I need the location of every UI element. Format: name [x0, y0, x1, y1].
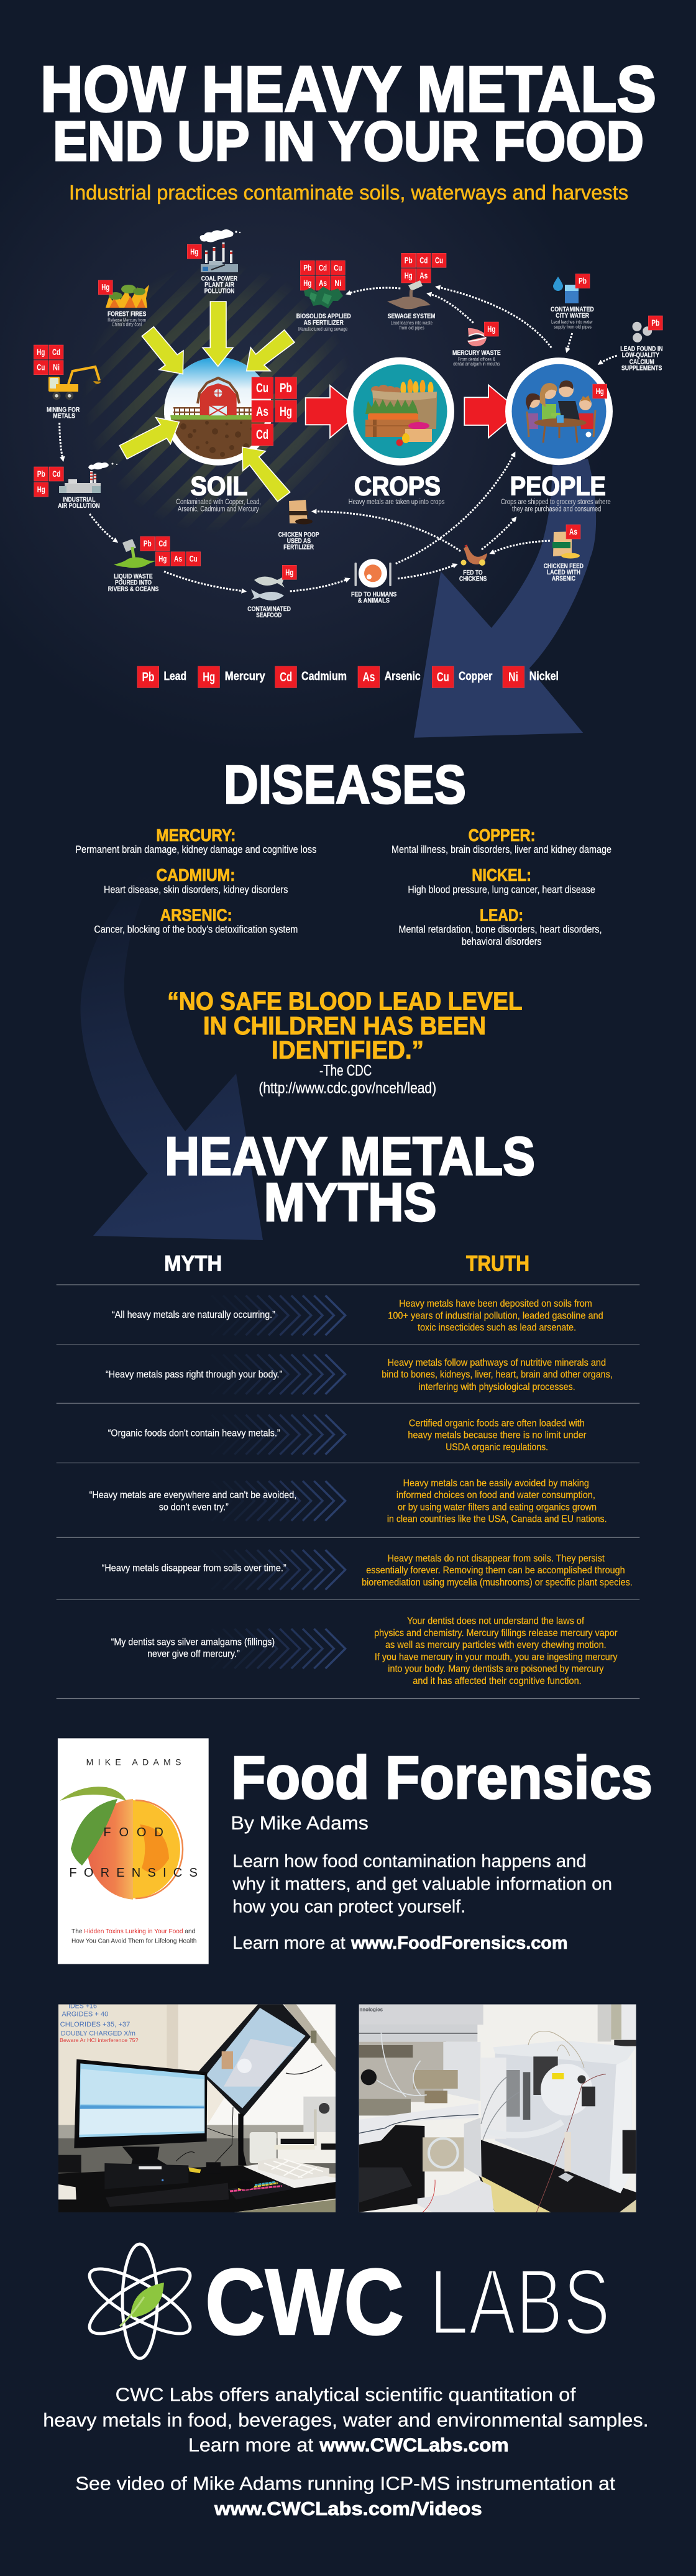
label: INDUSTRIAL [63, 496, 96, 504]
disease: cadmium [104, 865, 288, 895]
dotted flow arrows [60, 287, 617, 591]
label: CHICKENS [459, 576, 487, 583]
row 6: Your dentist does not understand the laws of [407, 1616, 584, 1626]
row 6: as well as mercury particles with every chewing motion. [385, 1640, 607, 1650]
row 6: into your body. Many dentists are poisoned by mercury [388, 1664, 603, 1675]
label [47, 407, 80, 420]
book text: How You Can Avoid Them for Lifelong Health [71, 1937, 197, 1944]
whiteboard notes: CHLORIDES +35, +37 [60, 2021, 130, 2028]
row 6: “My dentist says silver amalgams (fillings) [111, 1637, 275, 1647]
cwc labs logo [81, 2244, 610, 2358]
label: SEWAGE SYSTEM [388, 313, 435, 320]
label: FERTILIZER [283, 543, 314, 551]
label: LACED WITH [547, 569, 580, 576]
quote [167, 987, 523, 1097]
label [459, 569, 487, 583]
crops illustration [365, 379, 437, 446]
legend: Cadmium [301, 670, 347, 683]
row 4: or by using water filters and eating organics grown [398, 1502, 597, 1512]
crops circle [346, 357, 454, 466]
row 6: never give off mercury.” [147, 1649, 240, 1660]
logotype: CWC [205, 2249, 404, 2354]
row 3 [108, 1418, 587, 1453]
legend: Hg [203, 670, 215, 684]
row 5 [102, 1553, 633, 1588]
row 6: If you have mercury in your mouth, you are ingesting mercury [375, 1652, 618, 1662]
disease: arsenic: ARSENIC: [160, 905, 232, 924]
icon: coal plant [200, 229, 240, 272]
family at table illustration [526, 380, 595, 443]
label [544, 563, 584, 582]
badges: Pb [303, 262, 311, 272]
icon: plate with salmon, fork and knife [354, 559, 392, 587]
book text: FOOD [103, 1826, 163, 1839]
fence [173, 407, 252, 415]
promo link: www.FoodForensics.com [350, 1933, 568, 1953]
badges [34, 345, 63, 375]
cwc labs description: www.CWCLabs.com [319, 2434, 509, 2455]
panel: crops [346, 357, 454, 506]
label: METALS [53, 413, 75, 420]
label: MERCURY WASTE [452, 349, 501, 357]
badges [300, 260, 345, 290]
label: RIVERS & OCEANS [108, 586, 158, 593]
label: POURED INTO [115, 579, 152, 587]
legend: Lead [164, 670, 186, 683]
label [278, 531, 319, 551]
badge: Pb [579, 276, 587, 286]
row 1: toxic insecticides such as lead arsenate. [418, 1323, 576, 1333]
promo description: why it matters, and get valuable information on [232, 1874, 612, 1894]
disease: cadmium: CADMIUM: [156, 865, 235, 885]
book text: MIKE ADAMS [86, 1757, 181, 1767]
label [108, 573, 158, 593]
description: Manufactured using sewage [298, 326, 347, 332]
badges: Ni [53, 362, 60, 372]
red arrow: soil to crops [306, 385, 362, 438]
legend: Pb [142, 670, 154, 684]
icon: forest fire [106, 285, 149, 308]
legend: Copper [459, 670, 493, 683]
icon: fertilizer bag [289, 500, 313, 525]
soil arrows [119, 301, 295, 502]
icon: pouring sewage [387, 280, 431, 309]
icon: excavator [48, 367, 101, 400]
row 2: interfering with physiological processes. [419, 1382, 575, 1392]
quote: IN CHILDREN HAS BEEN [203, 1011, 486, 1040]
description: From dental offices & [458, 356, 495, 362]
label: SEAFOOD [256, 612, 282, 619]
promo link [232, 1933, 568, 1953]
promo description: Learn how food contamination happens and [232, 1852, 587, 1872]
badges: Cd [52, 469, 60, 479]
icon: green biosolid pile [304, 287, 343, 308]
row 5: essentially forever. Removing them can be accomplished through [366, 1565, 625, 1576]
badge: Hg [101, 282, 109, 292]
people badge [593, 384, 607, 398]
source: forest fires [98, 280, 149, 328]
description: from old pipes [400, 324, 424, 331]
icon: atom with leaf [81, 2244, 198, 2358]
disease: mercury: Permanent brain damage, kidney damage and cognitive loss [75, 844, 316, 855]
label: AS FERTILIZER [304, 319, 344, 326]
people badge: Hg [596, 386, 604, 396]
legend: Cu [437, 670, 449, 684]
label: AIR POLLUTION [58, 502, 100, 510]
panel: food forensics promo [231, 1744, 652, 1953]
row 6: physics and chemistry. Mercury fillings release mercury vapor [374, 1628, 618, 1639]
label: CITY WATER [556, 312, 589, 320]
source: biosolids [296, 260, 351, 332]
badge: Pb [651, 318, 659, 328]
row 1: 100+ years of industrial pollution, leaded gasoline and [388, 1310, 603, 1321]
crops heading: CROPS [354, 472, 441, 502]
myths heading [165, 1126, 535, 1233]
video call to action [75, 2473, 616, 2519]
description: China's dirty coal [112, 321, 142, 328]
description [551, 318, 593, 329]
row 3: heavy metals because there is no limit under [408, 1430, 587, 1441]
people circle [505, 357, 613, 465]
row 5: Heavy metals do not disappear from soils. They persist [388, 1553, 605, 1564]
badges: Pb [405, 255, 413, 265]
source: fed to humans and animals [351, 559, 396, 604]
badges: Hg [37, 347, 45, 357]
panel: book cover [58, 1738, 209, 1964]
photo: ICP-MS instrument [359, 2004, 636, 2212]
panel: people [501, 357, 613, 513]
whiteboard notes [60, 2003, 139, 2043]
second blue swoosh arrow from diseases to myths [80, 852, 263, 1240]
badge: Hg [487, 324, 495, 334]
label: COAL POWER [201, 275, 237, 283]
badges [140, 536, 201, 566]
badges: Cu [190, 554, 198, 564]
row 6 [111, 1616, 618, 1686]
badges: As [419, 270, 428, 280]
badge: Hg [285, 567, 293, 577]
disease: nickel: High blood pressure, lung cancer, heart disease [408, 884, 595, 895]
promo description [232, 1852, 612, 1917]
label: CONTAMINATED [247, 605, 291, 613]
badges: Cu [37, 362, 45, 372]
promo description: how you can protect yourself. [232, 1897, 465, 1917]
badges [401, 253, 446, 283]
description: dental amalgam in mouths [453, 361, 500, 367]
disease: nickel [408, 865, 595, 895]
soil metal badges: Pb [280, 381, 292, 395]
badges: As [174, 554, 182, 564]
row 6: and it has affected their cognitive function. [413, 1676, 582, 1686]
badges: As [319, 278, 327, 288]
badges: Hg [158, 554, 167, 564]
label: USED AS [287, 537, 311, 545]
barn [198, 378, 239, 415]
badges [34, 467, 63, 497]
book text [69, 1757, 198, 1944]
row 1 [112, 1299, 603, 1333]
label: ARSENIC [552, 575, 575, 582]
row 4: informed choices on food and water consumption, [396, 1490, 595, 1501]
red arrow: crops to people [464, 385, 520, 438]
label [296, 313, 351, 326]
label: FED TO [463, 569, 483, 577]
badges: Pb [37, 469, 45, 479]
soil caption: Contaminated with Copper, Lead, [176, 497, 261, 506]
label [351, 591, 396, 604]
photo: ICP-MS instrument: nnologies [359, 2007, 383, 2012]
row 1: “All heavy metals are naturally occurring.” [112, 1310, 275, 1320]
icon: dentures [467, 328, 487, 346]
photo: lab workstation with monitors [58, 2003, 336, 2212]
icon: pills [633, 322, 652, 343]
diseases heading: DISEASES [224, 755, 466, 815]
quote: IDENTIFIED.” [272, 1036, 424, 1064]
row 5: “Heavy metals disappear from soils over time.” [102, 1563, 286, 1573]
soil circle [164, 357, 273, 466]
label: LEAD FOUND IN [620, 345, 663, 352]
label: MINING FOR [47, 407, 80, 414]
description: Lead leaches into waste [391, 320, 433, 326]
cwc labs description: CWC Labs offers analytical scientific quantitation of [116, 2385, 576, 2406]
logotype: LABS [429, 2249, 610, 2354]
label: LIQUID WASTE [114, 573, 153, 580]
cwc labs description: heavy metals in food, beverages, water and environmental samples. [43, 2409, 649, 2431]
quote: (http://www.cdc.gov/nceh/lead) [259, 1079, 436, 1097]
whiteboard notes: Beware Ar HCl interference 75? [60, 2037, 139, 2043]
people caption [501, 497, 611, 513]
row 3: Certified organic foods are often loaded with [409, 1418, 585, 1428]
soil caption [176, 497, 261, 513]
people caption: Crops are shipped to grocery stores where [501, 497, 611, 506]
description [391, 320, 433, 331]
myths heading: HEAVY METALS [165, 1126, 535, 1187]
description: Release Mercury from [108, 316, 146, 323]
title [40, 53, 656, 173]
whiteboard notes: DOUBLY CHARGED X/m [61, 2030, 135, 2038]
myth column heading: MYTH [164, 1251, 222, 1276]
disease: copper: Mental illness, brain disorders, liver and kidney damage [392, 844, 611, 855]
disease: mercury [75, 826, 316, 855]
description: Lead leaches into water [551, 318, 593, 324]
label [247, 605, 291, 619]
row 4: so don't even try.” [159, 1502, 229, 1512]
icon: factory [59, 462, 117, 493]
label: FOREST FIRES [108, 311, 146, 318]
source: mercury waste [452, 322, 501, 367]
source: fed to chickens [459, 545, 487, 583]
row 5: bioremediation using mycelia (mushrooms) or specific plant species. [362, 1577, 633, 1588]
truth column heading: TRUTH [466, 1251, 529, 1276]
source: contaminated city water [551, 274, 594, 329]
badges: Hg [37, 484, 45, 494]
description [108, 316, 146, 328]
source: calcium supplements [620, 316, 663, 372]
book text: The Hidden Toxins Lurking in Your Food and [71, 1928, 195, 1935]
quote: -The CDC [319, 1062, 372, 1079]
source: mining [34, 345, 101, 420]
label: LOW-QUALITY [622, 352, 660, 359]
legend: Cd [280, 670, 292, 684]
disease: cadmium: Heart disease, skin disorders, kidney disorders [104, 884, 288, 895]
label: BIOSOLIDS APPLIED [296, 313, 351, 320]
icon: bucket pouring green waste [114, 539, 157, 568]
badges: Cd [52, 347, 60, 357]
label: & ANIMALS [358, 597, 390, 604]
badges: Ni [334, 278, 341, 288]
myths heading: MYTHS [264, 1172, 437, 1233]
people heading: PEOPLE [510, 472, 606, 502]
row 2: bind to bones, kidneys, liver, heart, brain and other organs, [382, 1369, 613, 1380]
legend: Ni [508, 670, 518, 684]
source: chicken feed [544, 525, 584, 582]
soil heading: SOIL [190, 472, 247, 502]
subtitle: Industrial practices contaminate soils, waterways and harvests [69, 182, 628, 205]
source: sewage system [387, 253, 446, 331]
label: CHICKEN POOP [278, 531, 319, 538]
row 3: USDA organic regulations. [446, 1442, 548, 1453]
label: POLLUTION [204, 288, 234, 295]
label: CHICKEN FEED [544, 563, 584, 570]
disease: arsenic [94, 905, 298, 936]
peach illustration [60, 1787, 183, 1900]
badges: Cd [419, 255, 428, 265]
badges: Cu [334, 262, 342, 272]
legend: Nickel [529, 670, 559, 683]
row 2: “Heavy metals pass right through your body.” [106, 1369, 282, 1380]
olive diagonal stripes behind soil [99, 279, 336, 517]
label [201, 275, 237, 295]
row 4 [89, 1478, 607, 1525]
disease: copper: COPPER: [469, 826, 536, 845]
source: industrial air pollution [34, 462, 117, 510]
book text: FORENSICS [69, 1866, 198, 1880]
row 2: Heavy metals follow pathways of nutritive minerals and [388, 1358, 606, 1368]
disease: arsenic: Cancer, blocking of the body's detoxification system [94, 924, 298, 936]
title: HOW HEAVY METALS [40, 53, 656, 126]
label [551, 306, 594, 320]
icon: hen and chicks [461, 545, 487, 566]
row 4: Heavy metals can be easily avoided by making [403, 1478, 589, 1489]
source: liquid waste [108, 536, 201, 593]
legend [137, 666, 559, 688]
icon: two fish [251, 576, 285, 600]
panel: diseases [75, 755, 611, 947]
soil metal badges: Cd [256, 428, 268, 442]
panel: soil [119, 301, 296, 513]
source: contaminated seafood [247, 565, 296, 619]
source: chicken poop [278, 500, 319, 551]
title: END UP IN YOUR FOOD [53, 111, 644, 173]
cwc labs description [43, 2385, 649, 2455]
whiteboard notes: IDES +16 [68, 2003, 97, 2010]
disease: lead: behavioral disorders [462, 936, 542, 947]
disease: nickel: NICKEL: [472, 865, 531, 885]
description: supply from old pipes [554, 323, 592, 329]
people caption: they are purchased and consumed [512, 504, 601, 513]
icon: water drop and glass [553, 277, 579, 303]
row 1: Heavy metals have been deposited on soils from [399, 1299, 592, 1309]
disease: lead: Mental retardation, bone disorders, heart disorders, [398, 924, 602, 936]
legend: Mercury [225, 670, 265, 683]
crops caption: Heavy metals are taken up into crops [349, 497, 444, 506]
row 2 [106, 1358, 613, 1392]
row 4: in clean countries like the USA, Canada and EU nations. [387, 1514, 607, 1525]
badges: Cd [158, 538, 167, 548]
video call to action: See video of Mike Adams running ICP-MS instrumentation at [75, 2473, 616, 2494]
promo heading: Food Forensics [231, 1744, 652, 1811]
badges: Hg [405, 270, 413, 280]
label: SUPPLEMENTS [621, 364, 662, 372]
description [453, 356, 500, 367]
badges: Hg [303, 278, 311, 288]
disease: mercury: MERCURY: [156, 826, 236, 845]
badges: Pb [144, 538, 152, 548]
disease: lead: LEAD: [480, 905, 523, 924]
soil caption: Arsenic, Cadmium and Mercury [178, 504, 259, 513]
big blue swoosh arrow from people to diseases [414, 459, 596, 738]
legend: Arsenic [385, 670, 421, 683]
legend: As [363, 670, 375, 684]
label: PLANT AIR [204, 282, 234, 289]
label: CALCIUM [630, 358, 654, 366]
soil metal badges: As [256, 405, 268, 419]
background glow behind diagram [0, 56, 696, 752]
cwc labs description: Learn more at [188, 2434, 314, 2455]
badges: Cd [319, 262, 327, 272]
label: CONTAMINATED [551, 306, 594, 313]
panel: heavy metals myths [57, 1126, 639, 1698]
icon: feed bag [552, 531, 580, 558]
row 3: “Organic foods don't contain heavy metals.” [108, 1428, 280, 1438]
badge: Hg [190, 246, 198, 256]
label: FED TO HUMANS [351, 591, 396, 598]
byline: By Mike Adams [231, 1813, 369, 1834]
quote: “NO SAFE BLOOD LEAD LEVEL [167, 987, 523, 1016]
soil metal badges [252, 377, 296, 446]
disease: lead [398, 905, 602, 947]
soil metal badges: Cu [256, 381, 268, 395]
whiteboard notes: ARGIDES + 40 [62, 2010, 108, 2018]
label [58, 496, 100, 510]
label [620, 345, 663, 372]
video call to action: www.CWCLabs.com/Videos [214, 2498, 482, 2519]
row 4: “Heavy metals are everywhere and can't be avoided, [89, 1490, 296, 1501]
disease: copper [392, 826, 611, 855]
soil metal badges: Hg [280, 405, 292, 419]
logotype [205, 2249, 610, 2354]
source: coal power plant [187, 229, 240, 295]
promo link: Learn more at [232, 1933, 346, 1953]
badge: As [569, 527, 577, 536]
badges: Cu [435, 255, 443, 265]
